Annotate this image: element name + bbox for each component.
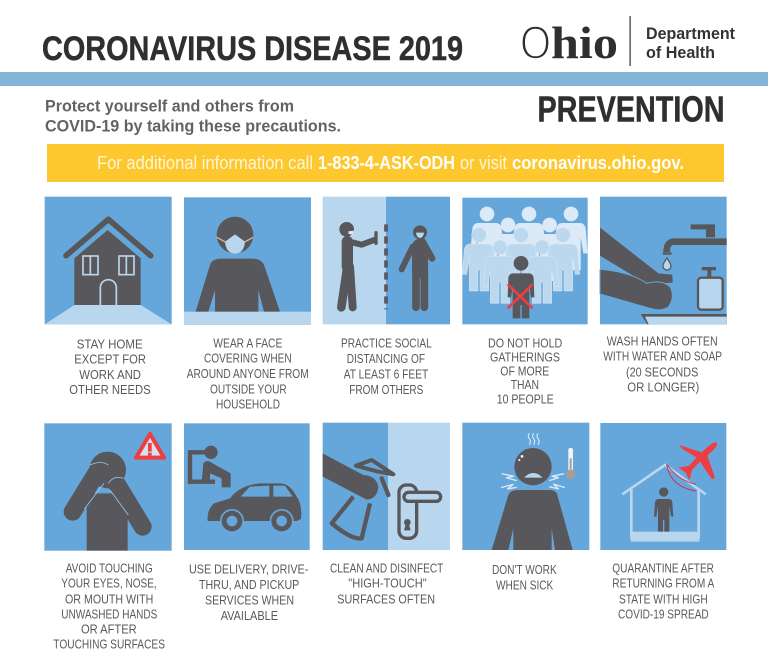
label: clean and disinfect: SURFACES OFTEN — [337, 592, 435, 606]
panel: wash hands — [600, 197, 727, 395]
logo: Ohio Department of Health — [520, 16, 735, 68]
icon: hands under faucet with soap — [600, 197, 727, 324]
panel: clean and disinfect — [323, 423, 450, 606]
panel: do not work when sick — [462, 423, 589, 592]
panel: social distancing — [323, 197, 450, 397]
panel: stay home — [45, 197, 172, 397]
label: quarantine after travel: STATE WITH HIGH — [619, 592, 708, 606]
label: stay home: OTHER NEEDS — [69, 383, 151, 397]
label: delivery and pickup: THRU, AND PICKUP — [199, 578, 299, 592]
label: quarantine after travel: COVID-19 SPREAD — [618, 607, 709, 621]
label: stay home: EXCEPT FOR — [74, 352, 146, 366]
callout: contact information banner: 1-833-4-ASK-ODH — [318, 153, 455, 173]
label: avoid touching face: UNWASHED HANDS — [61, 607, 157, 621]
icon: person touching face with warning sign — [44, 423, 172, 551]
callout: contact information banner: coronavirus.ohio.gov. — [512, 153, 684, 173]
icon: person wearing mask — [184, 197, 311, 325]
label: quarantine after travel: QUARANTINE AFTER — [612, 562, 714, 576]
label: wash hands: WITH WATER AND SOAP — [603, 350, 722, 364]
label: social distancing — [341, 337, 432, 397]
callout: contact information banner — [47, 144, 724, 182]
label: avoid touching face — [53, 562, 165, 652]
intro text — [45, 96, 341, 136]
label: do not work when sick: WHEN SICK — [496, 578, 554, 592]
label: avoid touching face: YOUR EYES, NOSE, — [61, 577, 157, 591]
logo: Ohio Department of Health: O — [520, 16, 551, 68]
icon: two people separated by dashed line — [323, 197, 450, 324]
label: gatherings — [488, 337, 562, 406]
blue header band — [0, 72, 768, 86]
logo: Ohio Department of Health: of Health — [646, 44, 715, 62]
label: social distancing: AT LEAST 6 FEET — [344, 368, 429, 382]
icon: person in house with airplane — [600, 423, 726, 550]
label: face covering: WEAR A FACE — [213, 336, 282, 350]
label: avoid touching face: TOUCHING SURFACES — [53, 638, 165, 652]
panel: face covering — [184, 197, 311, 412]
label: clean and disinfect: CLEAN AND DISINFECT — [330, 562, 444, 576]
intro text: COVID-19 by taking these precautions. — [45, 116, 341, 136]
label: gatherings: THAN — [511, 378, 539, 392]
logo: Ohio Department of Health: hio — [551, 17, 618, 68]
heading: prevention: PREVENTION — [538, 88, 724, 130]
label: face covering — [187, 336, 309, 412]
label: wash hands: (20 SECONDS — [626, 366, 698, 380]
label: social distancing: DISTANCING OF — [347, 352, 425, 366]
title: CORONAVIRUS DISEASE 2019 — [42, 30, 463, 68]
logo: Ohio Department of Health: Department — [646, 25, 735, 43]
label: wash hands: WASH HANDS OFTEN — [607, 334, 718, 348]
label: quarantine after travel: RETURNING FROM A — [612, 577, 715, 591]
label: do not work when sick: DON'T WORK — [492, 563, 557, 577]
label: wash hands — [603, 334, 722, 395]
panel: gatherings — [462, 198, 588, 406]
label: clean and disinfect: "HIGH-TOUCH" — [348, 577, 427, 591]
label: avoid touching face: AVOID TOUCHING — [66, 562, 153, 576]
callout: contact information banner: or visit — [460, 153, 507, 173]
icon: sick person with thermometer — [462, 423, 589, 550]
label: delivery and pickup: SERVICES WHEN — [205, 594, 294, 608]
label: do not work when sick — [492, 563, 557, 592]
label: social distancing: FROM OTHERS — [349, 383, 423, 397]
icon: car at pickup window — [184, 423, 310, 550]
label: clean and disinfect — [330, 562, 444, 606]
label: delivery and pickup — [189, 562, 308, 623]
label: face covering: COVERING WHEN — [204, 351, 292, 365]
panel: delivery and pickup — [184, 423, 310, 623]
label: avoid touching face: OR MOUTH WITH — [65, 592, 153, 606]
label: gatherings: 10 PEOPLE — [497, 392, 554, 406]
label: face covering: OUTSIDE YOUR — [210, 382, 287, 396]
label: stay home: WORK AND — [79, 368, 141, 382]
icon: hand with spray bottle and door handle — [323, 423, 450, 550]
callout: contact information banner: For additional information call — [97, 153, 313, 173]
label: stay home — [69, 337, 151, 397]
label: delivery and pickup: USE DELIVERY, DRIVE- — [189, 562, 308, 576]
label: quarantine after travel — [612, 562, 715, 621]
label: face covering: HOUSEHOLD — [216, 398, 280, 412]
label: wash hands: OR LONGER) — [627, 381, 699, 395]
label: face covering: AROUND ANYONE FROM — [187, 367, 309, 381]
icon: house — [45, 197, 172, 324]
panel: avoid touching face — [44, 423, 172, 652]
panel: quarantine after travel — [600, 423, 726, 621]
label: social distancing: PRACTICE SOCIAL — [341, 337, 432, 351]
intro text: Protect yourself and others from — [45, 96, 294, 116]
label: gatherings: DO NOT HOLD — [488, 337, 562, 351]
label: gatherings: OF MORE — [500, 365, 549, 379]
label: delivery and pickup: AVAILABLE — [221, 609, 278, 623]
icon: crowd with crossed out person — [462, 198, 588, 324]
label: stay home: STAY HOME — [77, 337, 143, 351]
label: avoid touching face: OR AFTER — [81, 623, 137, 637]
label: gatherings: GATHERINGS — [490, 350, 560, 364]
